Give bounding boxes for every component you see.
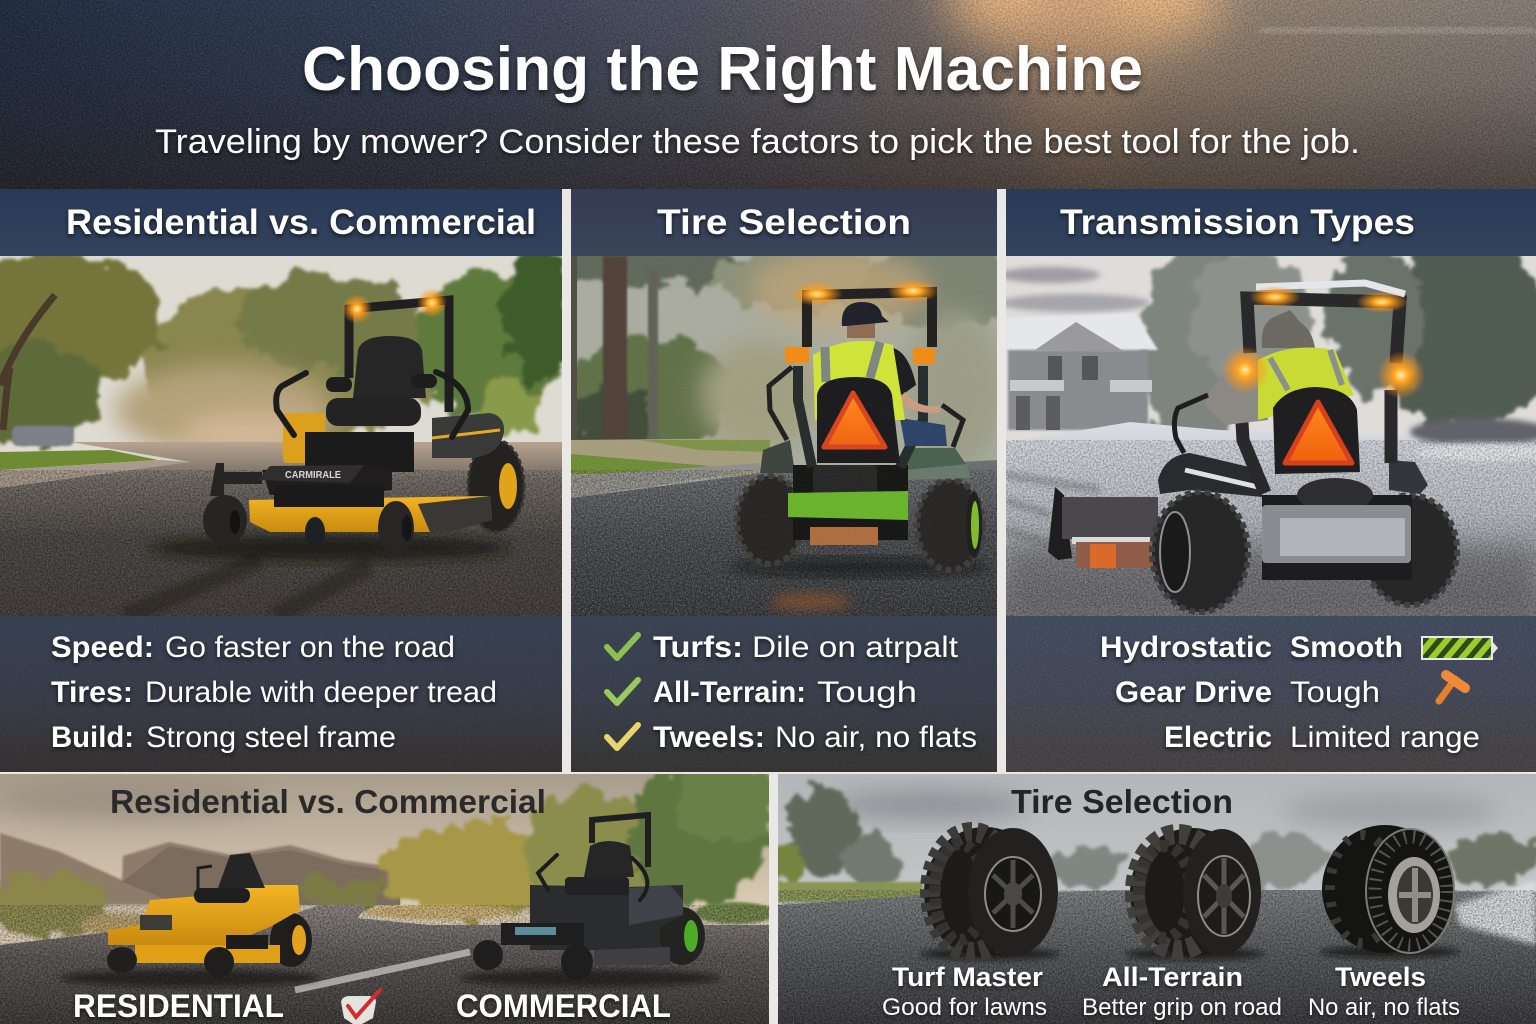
tree line [772,782,1536,890]
heading: Tire Selection [1011,783,1233,820]
rear tires [1363,495,1457,605]
panel: tire selection [550,189,1020,772]
panel: tire types comparison [772,774,1536,1024]
caption: all-terrain: All-Terrain [1102,962,1243,992]
seat [353,336,426,398]
rear wheel [468,440,524,532]
transmission table [1006,616,1536,772]
caption: turf master: Turf Master [892,962,1044,992]
operator [900,418,947,446]
transmission table: Electric [1164,721,1272,754]
feature list [0,616,562,772]
feature list: Build: [51,721,134,754]
transmission table: Tough [1290,676,1380,709]
road [0,905,769,1024]
feature list: Go faster on the road [165,631,455,664]
label: residential: RESIDENTIAL [73,988,284,1024]
plow deck [1048,487,1158,568]
parked car [12,426,74,446]
icon: checkmark [607,635,638,658]
icon: checkmark [607,725,638,748]
subtitle: Traveling by mower? Consider these factors to pick the best tool for the job. [155,123,1360,161]
heading: Residential vs. Commercial [110,783,546,820]
feature list: No air, no flats [775,721,977,754]
seat with triangle [817,377,900,463]
caption: all-terrain: Better grip on road [1082,994,1282,1021]
title: Choosing the Right Machine [302,35,1143,104]
panel: residential vs commercial [0,189,575,772]
seat [1273,387,1360,474]
header banner [0,0,1536,189]
panel: residential vs commercial comparison [0,760,775,1024]
tire: all-terrain [1130,828,1261,956]
rear tires [737,476,803,564]
tree line [0,250,575,447]
mountains [0,833,400,905]
panel heading [0,189,562,256]
grass and curb [571,438,770,476]
feature list: Strong steel frame [146,721,396,754]
panel heading [1006,189,1536,256]
tire: turf master [924,827,1058,957]
caption: turf master [882,962,1047,1021]
transmission table: Hydrostatic [1100,631,1272,664]
photo: snow-covered mower with plow [1000,240,1536,616]
transmission table: Limited range [1290,721,1480,754]
icon: red check badge [341,990,380,1024]
panel: transmission types [1000,189,1536,772]
panel heading: Transmission Types [1060,203,1415,242]
label: commercial: COMMERCIAL [456,988,671,1024]
house [1006,313,1158,350]
feature list: Durable with deeper tread [145,676,497,709]
caption: tweels [1308,962,1460,1021]
grass verge [0,450,158,470]
snowy road [1006,422,1536,616]
engine [813,465,877,494]
ROPS bar [349,300,449,412]
mower [737,279,983,570]
caption: tweels: No air, no flats [1308,994,1460,1021]
transmission table: Gear Drive [1115,676,1272,709]
panel heading: Residential vs. Commercial [66,203,536,242]
snowy bumper [1262,505,1411,563]
plate [810,527,878,545]
photo: mower rear view in rain [571,256,997,616]
wet road [571,460,997,616]
yellow residential mower [107,853,312,977]
icon: battery [1422,637,1498,659]
panel heading [571,189,997,256]
icon: checkmark [607,680,638,703]
photo: yellow zero-turn mower on road [0,250,575,616]
feature list: Tough [817,676,917,709]
ROPS and work lights [807,292,932,347]
bushes and trees [0,760,775,937]
feature list: Dile on atrpalt [752,631,959,664]
feature list [571,616,997,772]
ROPS with snow [1247,298,1400,363]
transmission table: Smooth [1290,631,1403,664]
feature list: Turfs: [653,631,743,664]
fenders [1158,453,1262,497]
panel heading: Tire Selection [657,203,911,242]
lap bars [276,373,306,435]
tire: tweels airless [1322,825,1454,953]
road [778,890,1536,1024]
bumper [788,491,908,520]
black commercial mower [473,815,705,980]
slow-moving triangle [1285,402,1352,463]
fenders [760,440,795,473]
feature list: Tires: [51,676,133,709]
front casters [203,495,247,545]
mower body [203,288,524,555]
caption: tweels: Tweels [1335,962,1426,992]
feature list: All-Terrain: [653,676,806,709]
slow-moving triangle [824,393,885,447]
feature list: Speed: [51,631,154,664]
caption: all-terrain [1082,962,1282,1021]
snowy trees [1138,256,1536,430]
mower body: CARMIRALE [285,470,341,481]
mower [1152,283,1457,612]
caption: turf master: Good for lawns [882,994,1047,1021]
road [0,442,562,616]
operator [1262,310,1315,348]
icon: hammer [1439,675,1465,701]
feature list: Tweels: [653,721,765,754]
